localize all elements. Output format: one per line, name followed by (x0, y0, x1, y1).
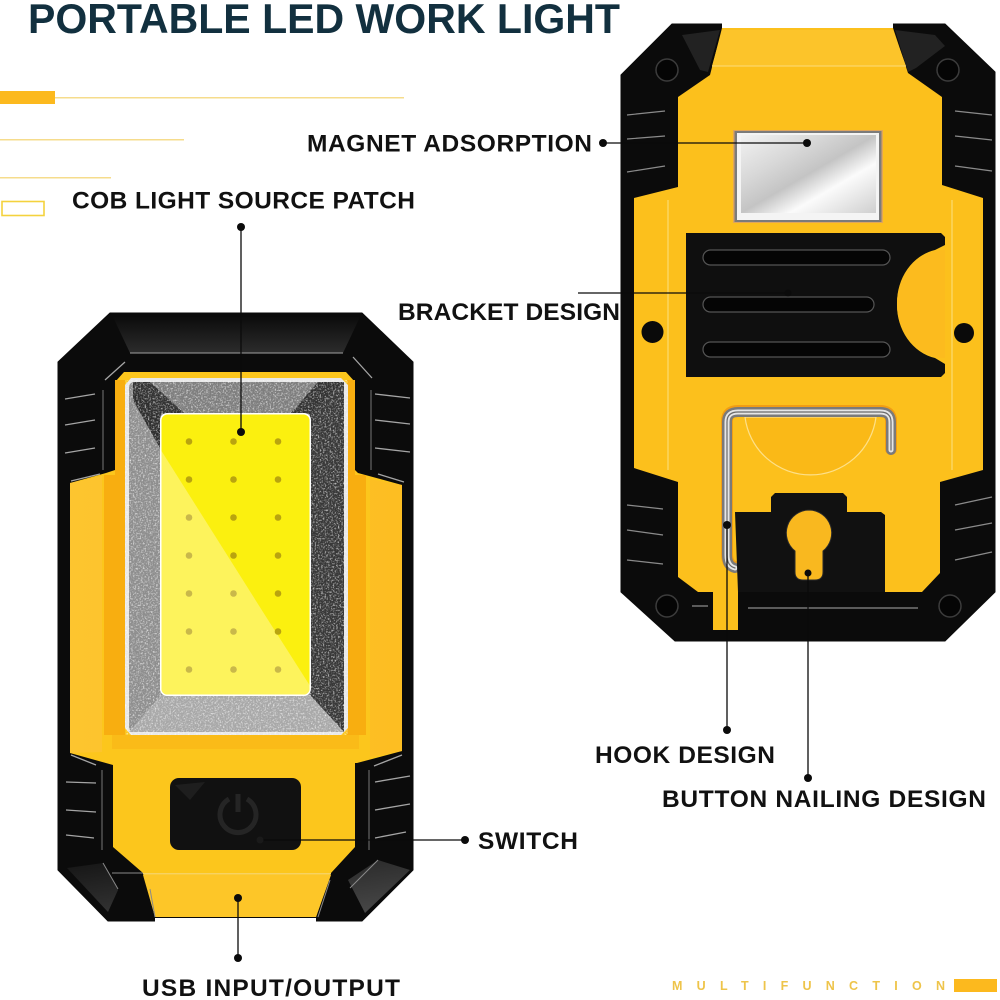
corner screw holes (656, 59, 961, 617)
top facet (113, 317, 360, 353)
callout: hook design: HOOK DESIGN (595, 742, 775, 769)
power icon (220, 794, 256, 833)
black housing back (621, 24, 995, 641)
device: back view work light (621, 20, 995, 641)
corner facets (67, 860, 410, 913)
corner facets (682, 30, 945, 72)
top yellow band (712, 30, 906, 66)
bracket clip (686, 233, 945, 377)
hook (727, 411, 891, 568)
callout: bracket design (398, 290, 792, 326)
callout: switch (256, 828, 578, 855)
callout: button nailing design: BUTTON NAILING DESIGN (662, 786, 986, 813)
callout: COB light source patch (72, 188, 415, 436)
callout: USB input/output (142, 894, 400, 1000)
callout: magnet adsorption: MAGNET ADSORPTION (307, 130, 592, 158)
bottom strip (143, 875, 331, 917)
dome recess (745, 417, 876, 475)
LED dots (186, 438, 281, 673)
black housing front (58, 313, 413, 921)
notch (897, 250, 945, 358)
magnet plate (733, 130, 883, 223)
grooves (703, 250, 890, 357)
callout: bracket design: BRACKET DESIGN (398, 299, 620, 326)
inner orange shade (104, 380, 366, 735)
yellow body front (70, 372, 402, 917)
callout: button nailing design (662, 570, 986, 813)
keyhole block (735, 493, 885, 592)
mounting holes (642, 321, 974, 343)
silver frame around COB (125, 378, 348, 735)
footer tag: multifunction: MULTIFUNCTION (672, 979, 945, 993)
callout: switch: SWITCH (478, 828, 578, 855)
switch button (170, 778, 301, 850)
side strips (70, 476, 402, 757)
COB yellow panel (160, 413, 311, 696)
callout: magnet adsorption (307, 130, 811, 158)
white gap at the top (722, 20, 893, 28)
light panel lines (668, 200, 952, 470)
decorative header bars (0, 91, 404, 216)
keyhole (786, 510, 832, 580)
device: front view work light (58, 313, 413, 922)
ridges (65, 357, 410, 838)
white gap below housing front (155, 918, 316, 922)
callout: hook design (595, 521, 775, 769)
yellow body back (634, 28, 983, 630)
callout: COB light source patch: COB LIGHT SOURCE PATCH (72, 188, 415, 214)
ridges back (627, 111, 992, 608)
